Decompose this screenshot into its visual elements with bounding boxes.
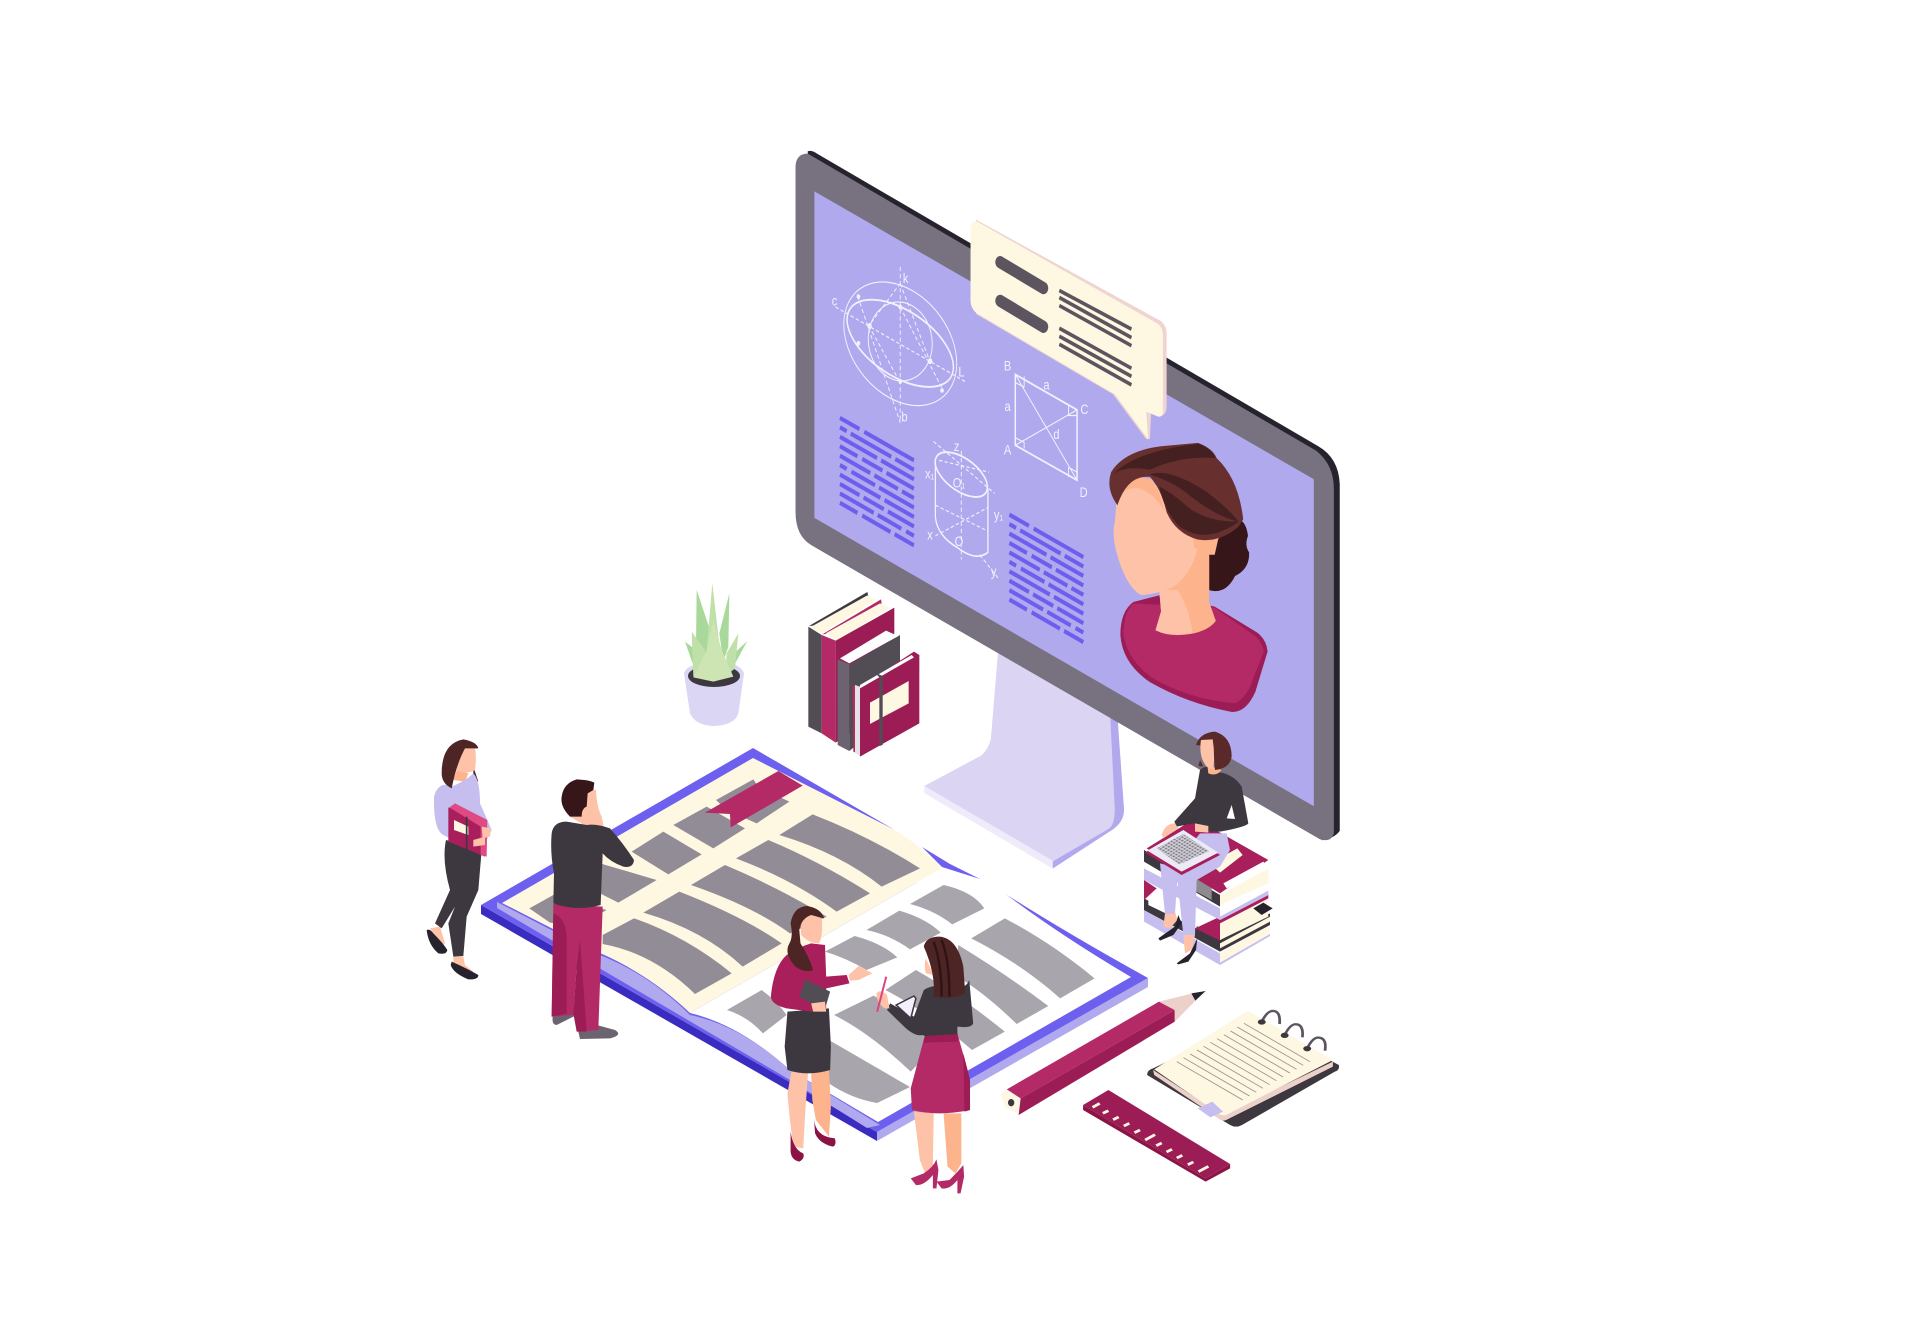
seated woman on stack of books [1144, 732, 1273, 965]
diagram: rectangle with diagonals: B [1004, 357, 1011, 374]
diagram: rectangle with diagonals: A [1004, 441, 1012, 458]
head and hair [1196, 732, 1232, 774]
diagram: ellipse geometry: L [958, 363, 964, 380]
icon: pencil [1001, 991, 1206, 1115]
monitor screen [814, 191, 1314, 806]
right page [690, 868, 1131, 1122]
icon: ruler [1083, 1090, 1230, 1182]
text block: left paragraph lines [840, 418, 914, 545]
icon: spiral notepad [1147, 1011, 1339, 1127]
left page [502, 758, 942, 1013]
monitor bezel [796, 154, 1334, 840]
left page content blocks [529, 779, 920, 994]
diagram: rectangle with diagonals: d [1053, 426, 1060, 442]
diagram: rectangle with diagonals: a [1005, 397, 1012, 414]
tablet [1145, 829, 1220, 875]
book cover [481, 748, 1148, 1141]
speech bubble [971, 220, 1167, 439]
diagram: rectangle with diagonals: C [1080, 401, 1088, 417]
diagram: cylinder: y [991, 563, 997, 579]
diagram: ellipse geometry [826, 256, 975, 431]
monitor [796, 151, 1340, 840]
diagram: cylinder: O [955, 533, 963, 550]
diagram: ellipse geometry: c [832, 292, 838, 309]
icon: stack of upright books [808, 592, 919, 757]
woman in dark jacket and magenta skirt [876, 937, 973, 1193]
diagram: cylinder: y₁ [994, 506, 1003, 523]
text block: right paragraph lines [1009, 515, 1083, 642]
portrait of teacher [1109, 443, 1268, 712]
woman holding books [427, 739, 492, 979]
diagram: rectangle with diagonals [1004, 357, 1088, 501]
diagram: cylinder: O₁ [953, 474, 965, 491]
lavender page edges [497, 902, 880, 1128]
right page content blocks [727, 885, 1095, 1103]
open book [481, 748, 1148, 1141]
diagram: cylinder: x₁ [925, 465, 934, 482]
diagram: ellipse geometry: k [903, 270, 909, 286]
icon: potted plant [684, 583, 747, 726]
legs and shoes [1158, 833, 1230, 964]
monitor back edge [808, 151, 1340, 840]
bookmark [705, 771, 803, 827]
stack of books [1144, 818, 1273, 965]
diagram: cylinder [925, 438, 1003, 579]
monitor stand [924, 649, 1124, 869]
diagram: cylinder: z [954, 438, 959, 454]
diagram: ellipse geometry: b [901, 408, 908, 425]
woman in magenta sweater and grey skirt [771, 906, 872, 1162]
diagram: cylinder: x [927, 526, 933, 543]
standing man [551, 779, 634, 1039]
diagram: rectangle with diagonals: D [1080, 484, 1088, 501]
torso and arms [1162, 767, 1248, 838]
diagram: rectangle with diagonals: a [1043, 376, 1050, 393]
